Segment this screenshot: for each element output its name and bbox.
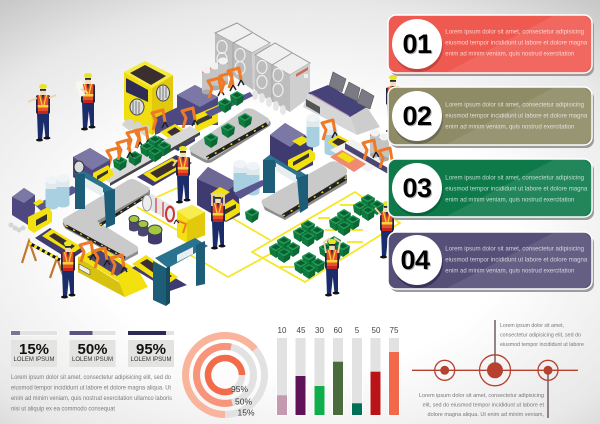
panel 03: 03 (402, 173, 432, 203)
timeline top text (500, 323, 584, 348)
panel 03: Lorem ipsum dolor sit amet, consectetur adipisicing (445, 174, 584, 182)
left paragraph: eiusmod tempor incididunt ut labore et dolore magna aliqua. Ut (11, 384, 171, 392)
bar chart: 5 (355, 326, 360, 335)
panel 02: 02 (403, 102, 433, 132)
yellow tray center (137, 155, 192, 186)
bar chart: 50 (372, 326, 381, 335)
central purple machine (197, 167, 240, 222)
donut labels: 15% (238, 408, 255, 418)
L shaped conveyor (63, 179, 150, 261)
panel 01: 01 (403, 30, 433, 60)
bar chart: 75 (390, 326, 399, 335)
stat 15%: LOLEM IPSUM (13, 357, 55, 363)
timeline bottom text: dolore magna aliqua. Ut enim ad minim veniam, (428, 412, 544, 418)
upper left purple machine (73, 148, 113, 185)
tall server cabinets (215, 23, 310, 115)
worker 7 (375, 201, 394, 258)
panel 01: eiusmod tempor incididunt ut labore et dolore magna (445, 39, 588, 46)
timeline (412, 320, 584, 418)
panel 04 (388, 232, 594, 292)
panel 01: Lorem ipsum dolor sit amet, consectetur adipisicing (445, 28, 584, 35)
donut chart (186, 336, 264, 418)
panel 04: 04 (400, 245, 430, 275)
panel 02: Lorem ipsum dolor sit amet, consectetur adipisicing (445, 102, 584, 108)
tray right of robot base (132, 255, 187, 291)
donut labels (231, 384, 255, 418)
purple machine behind yellow tower (177, 85, 218, 133)
lone green box (245, 208, 259, 223)
conveyor belt lower center (261, 161, 347, 220)
stat 15% (10, 330, 58, 367)
panel 03: 03 (403, 174, 433, 204)
panel 03: eiusmod tempor incididunt ut labore et dolore magna (445, 186, 588, 192)
yellow floor lines (137, 188, 400, 282)
factory illustration (8, 23, 400, 306)
teal arch center (263, 153, 308, 213)
tall yellow machine (124, 61, 178, 135)
bar chart: 45 (297, 326, 306, 335)
timeline top text: eiusmod tempor incididunt ut labore (500, 342, 584, 348)
worker 1 (28, 84, 56, 142)
stat 95% (128, 330, 174, 367)
panel 02 (388, 87, 594, 148)
left paragraph: nisi ut aliquip ex ea commodo consequat (11, 406, 115, 412)
timeline bottom text: Lorem ipsum dolor sit amet, consectetur adipisicing (419, 393, 544, 399)
panel 02: enim ad minim veniam, quis nostrud exercitation (445, 124, 575, 130)
panel 04: eiusmod tempor incididunt ut labore et dolore magna (445, 256, 588, 264)
purple machine with yellow unit (270, 123, 315, 172)
peach machine right conveyor (330, 139, 395, 178)
green box groups (269, 194, 384, 279)
donut labels: 95% (231, 384, 248, 394)
stat 50% (69, 330, 116, 367)
conveyor belt upper center (189, 108, 271, 163)
left paragraph (11, 374, 172, 412)
stat 95%: 95% (136, 341, 166, 358)
silver tanks and robots upper row (202, 58, 253, 117)
worker 4 (61, 241, 76, 298)
canister (142, 194, 176, 222)
bar chart: 60 (334, 326, 343, 335)
timeline top text: consectetur adipisicing elit, sed do (500, 332, 581, 338)
worker 6 (324, 238, 340, 296)
bar chart: 30 (315, 326, 324, 335)
panel 01: 01 (402, 29, 432, 59)
worker 3 (173, 146, 190, 204)
teal arch left (75, 171, 115, 228)
robot arms by yellow machine (152, 108, 198, 151)
stat 15%: 15% (19, 341, 49, 358)
bar chart (276, 326, 400, 416)
laptop console machine (303, 72, 380, 135)
panel 04: Lorem ipsum dolor sit amet, consectetur adipisicing (445, 246, 584, 252)
worker 5 (211, 192, 226, 250)
panel 02: eiusmod tempor incididunt ut labore et dolore magna (445, 112, 588, 120)
silver tanks right with robot arms (363, 130, 395, 168)
panel 02: 02 (402, 101, 432, 131)
left paragraph: enim ad minim veniam, quis nostrud exercitation ullamco laboris (11, 395, 172, 402)
striped barrier (22, 241, 63, 278)
panel 01: enim ad minim veniam, quis nostrud exercitation (445, 50, 575, 57)
panel 03 (388, 159, 594, 220)
worker 8 (384, 73, 400, 132)
tray left bottom (35, 228, 85, 260)
panel 03: enim ad minim veniam, quis nostrud exercitation (445, 196, 575, 204)
stat 50%: LOLEM IPSUM (72, 357, 113, 363)
left machine with jars (12, 174, 80, 233)
timeline top text: Lorem ipsum dolor sit amet, (500, 323, 564, 329)
donut labels: 50% (235, 396, 252, 406)
timeline bottom text: elit, sed do eiusmod tempor incididunt ut labore et (423, 402, 544, 408)
panel 01 (388, 15, 594, 76)
stat 95%: LOLEM IPSUM (130, 357, 172, 363)
yellow robot machine (174, 205, 205, 243)
left paragraph: Lorem ipsum dolor sit amet, consectetur adipisicing elit, sed do (11, 374, 172, 381)
bar chart: 10 (278, 326, 287, 335)
timeline bottom text (419, 393, 544, 418)
small silver parts (8, 222, 26, 232)
conveyor top left with green boxes (98, 119, 200, 186)
stat 50%: 50% (77, 341, 108, 358)
yellow robot base (78, 242, 148, 298)
panel 04: enim ad minim veniam, quis nostrud exercitation (445, 268, 575, 274)
paint cans (129, 216, 162, 244)
jars and robot arm right (306, 114, 352, 156)
teal arch bottom (153, 238, 208, 306)
panel 04: 04 (401, 246, 431, 276)
worker 2 with paper (75, 73, 96, 130)
jars center (234, 160, 268, 199)
